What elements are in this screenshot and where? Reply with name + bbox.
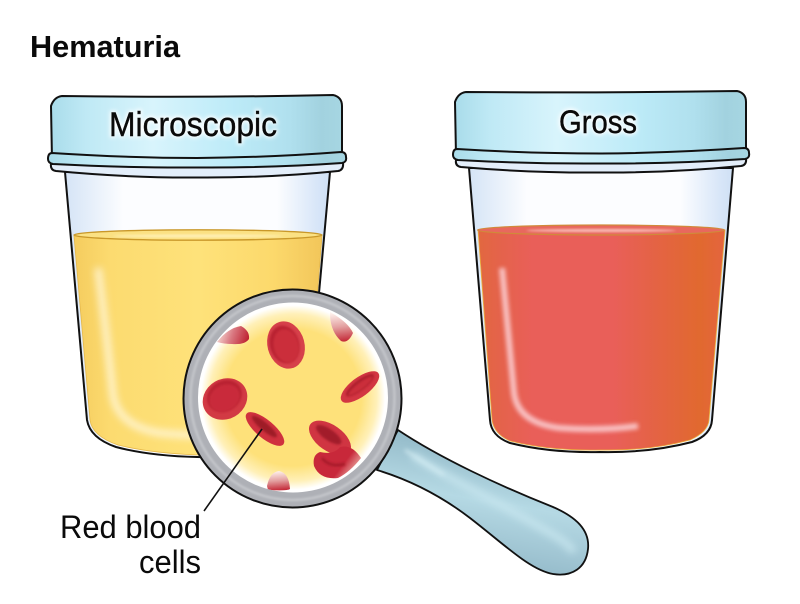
cell: right — [340, 371, 380, 403]
cell: left — [202, 378, 248, 420]
cell: top left — [217, 326, 249, 344]
cell: top — [267, 321, 305, 369]
label: red blood cells: Red blood — [60, 509, 201, 545]
handle — [377, 430, 588, 575]
label: Gross: Gross — [559, 104, 637, 140]
cell: pointed — [246, 412, 284, 446]
leader line — [204, 429, 262, 511]
lens view — [198, 302, 388, 492]
label: Gross: Gross — [559, 104, 637, 140]
red blood cells — [195, 312, 384, 490]
title: Hematuria — [30, 29, 181, 64]
cell: bottom — [267, 471, 290, 490]
label: Microscopic: Microscopic — [109, 106, 277, 144]
cup: microscopic — [48, 95, 346, 457]
cup body: gross — [469, 168, 733, 452]
lid: microscopic — [48, 95, 346, 178]
cell: top right — [330, 312, 353, 342]
cell: lower stack — [309, 420, 361, 478]
label: Microscopic: Microscopic — [109, 106, 277, 144]
lid: gross — [453, 91, 749, 173]
liquid: red urine — [478, 225, 725, 450]
label: red blood cells — [60, 509, 201, 580]
lens rim highlight — [190, 296, 394, 500]
cup body: microscopic — [65, 172, 330, 457]
magnifying glass — [184, 290, 588, 575]
label: red blood cells: cells — [139, 544, 201, 580]
cup: gross — [453, 91, 749, 452]
liquid: yellow urine — [74, 230, 322, 455]
lens rim — [184, 290, 402, 508]
